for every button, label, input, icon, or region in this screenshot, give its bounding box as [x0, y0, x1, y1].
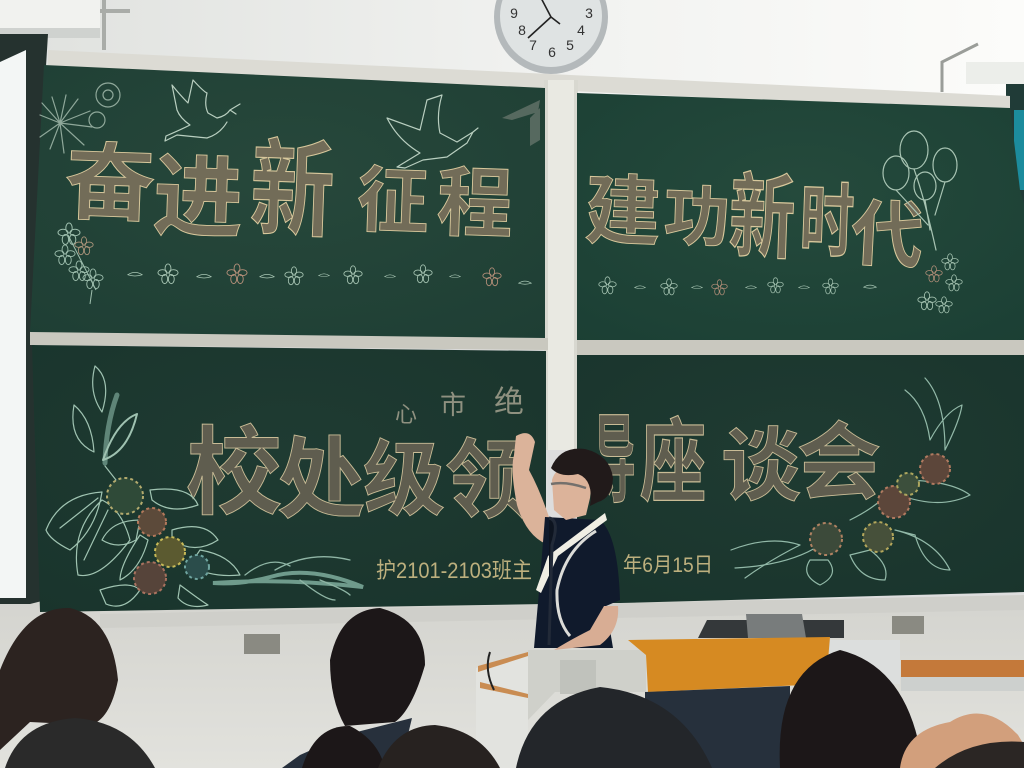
frame dividers [30, 80, 1024, 450]
panel: bottom right blackboard [577, 355, 1024, 603]
audience heads [0, 608, 1024, 768]
illustration: flowers and leaves [731, 378, 970, 585]
left projector screen edge [0, 34, 48, 604]
heading: 导座谈会 [594, 410, 881, 516]
date label: 年6月15日 [623, 554, 713, 577]
flower row [599, 277, 876, 295]
heading: 建功新时代: 功 [662, 181, 731, 256]
heading: 建功新时代: 代 [849, 194, 925, 278]
icon: dove right [387, 95, 478, 168]
hair [551, 449, 613, 506]
chalk tray [100, 595, 1024, 628]
board frame [48, 50, 1010, 112]
heading: 校处级领: 处 [277, 433, 365, 530]
presenter [513, 433, 620, 650]
heading: 奋进新征程: 奋 [63, 137, 157, 233]
panel: bottom left blackboard [32, 345, 546, 612]
collar and stripe [536, 513, 607, 593]
heading: 建功新时代: 建 [583, 170, 662, 256]
heading: 导座谈会: 座 [640, 414, 706, 515]
heading: 校处级领 [186, 420, 531, 530]
heading: 建功新时代: 时 [798, 177, 855, 269]
flower row [128, 264, 531, 286]
illustration: leaf sprig [73, 366, 137, 480]
wall clock: 5 [566, 37, 574, 53]
heading: 建功新时代: 新 [727, 167, 797, 272]
heading: 奋进新征程: 程 [435, 162, 514, 248]
wall clock [494, 0, 608, 74]
icon: clover cluster [55, 223, 103, 304]
raised arm [513, 433, 550, 544]
heading: 奋进新征程: 新 [248, 132, 336, 252]
forearm [554, 606, 618, 650]
wall bracket: right [942, 44, 1024, 204]
icon: dove left [165, 80, 240, 141]
heading: 奋进新征程: 进 [151, 148, 245, 251]
heading: 校处级领: 校 [186, 420, 282, 527]
handwritten note: 心 市 编 [395, 386, 524, 427]
heading: 导座谈会: 会 [797, 418, 881, 511]
microphone [549, 518, 555, 645]
illustration: large flowers and leaves [46, 478, 363, 606]
heading: 导座谈会: 谈 [721, 424, 801, 512]
wall light fixture: left [0, 0, 130, 50]
wall clock: 9 [510, 5, 518, 21]
heading: 奋进新征程: 征 [355, 161, 430, 243]
illustration: grass sprig [213, 557, 363, 600]
handwritten note: 心 市 编: 绝 [494, 386, 524, 419]
icon: balloons [883, 131, 957, 250]
wall clock: 7 [529, 37, 537, 53]
wall clock: 3 [585, 5, 593, 21]
wall clock: 4 [577, 22, 585, 38]
dress [534, 517, 620, 648]
handwritten note: 心 市 编: 心 [395, 402, 417, 427]
heading: 导座谈会: 导 [594, 410, 636, 516]
panel: top left blackboard [30, 65, 545, 338]
monitor behind podium [698, 614, 844, 638]
wall clock: 6 [548, 44, 556, 60]
wall clock: 8 [518, 22, 526, 38]
heading: 奋进新征程 [63, 132, 514, 252]
heading: 校处级领: 级 [363, 435, 445, 526]
lower wall [0, 600, 1024, 768]
heading: 建功新时代 [583, 167, 925, 278]
wall [0, 0, 1024, 110]
glasses [551, 483, 586, 488]
face [552, 466, 591, 520]
class label: 护2101-2103班主 [376, 558, 532, 583]
handwritten note: 心 市 编: 市 [440, 390, 466, 420]
tray clips [244, 616, 924, 654]
eraser smudge [502, 100, 540, 146]
podium [476, 637, 1024, 768]
heading: 校处级领: 领 [445, 433, 531, 529]
panel: top right blackboard [577, 93, 1024, 340]
icon: fireworks and roses [40, 83, 120, 153]
icon: clover cluster [918, 254, 962, 313]
